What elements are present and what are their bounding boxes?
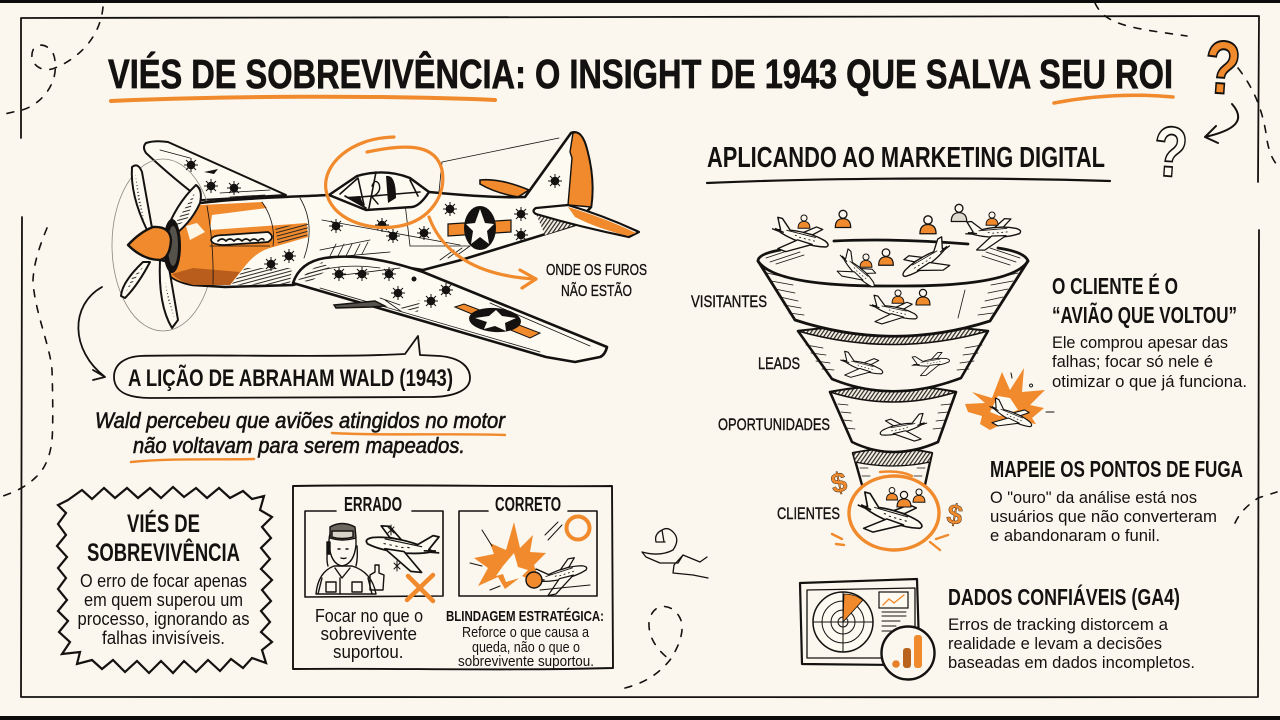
text block: escape points: usuários que não converteram bbox=[990, 507, 1217, 526]
icon: specks bbox=[388, 525, 400, 571]
icon: orange question mark: ? bbox=[1202, 25, 1243, 111]
starburst: definition: falhas invisíveis. bbox=[102, 628, 225, 648]
starburst: definition bbox=[57, 487, 272, 673]
caption: correto: Reforce o que causa a bbox=[462, 625, 590, 641]
text block: reliable data: Erros de tracking distorcem a bbox=[948, 615, 1169, 634]
text block: the customer: otimizar o que já funciona. bbox=[1052, 372, 1247, 391]
arrow: cockpit to missing holes note bbox=[429, 217, 536, 288]
sub-panel: errado: ERRADO bbox=[344, 494, 402, 516]
speech bubble: lesson heading: A LIÇÃO DE ABRAHAM WALD (1943) bbox=[128, 364, 453, 392]
fuselage bbox=[165, 132, 592, 287]
lesson text: não voltavam para serem mapeados. bbox=[133, 433, 465, 458]
funnel hatching bbox=[766, 248, 1020, 476]
wing gun bbox=[334, 301, 385, 308]
arrow: plane to lesson bbox=[78, 287, 105, 380]
cowling orange bbox=[167, 202, 308, 285]
caption: errado: Focar no que o bbox=[315, 606, 423, 626]
icon: impact ball bbox=[526, 572, 542, 588]
note: where the holes are not bbox=[546, 262, 647, 300]
scribble: hand doodle bbox=[642, 529, 708, 578]
funnel tier 2 bbox=[798, 326, 988, 391]
caption: correto: BLINDAGEM ESTRATÉGICA: bbox=[446, 608, 604, 625]
canopy glass and pilot bbox=[340, 172, 420, 208]
bottom black edge bbox=[0, 716, 1280, 720]
caption: errado: sobrevivente bbox=[320, 624, 417, 644]
text block: escape points: e abandonaram o funil. bbox=[990, 526, 1160, 545]
dashed flight path: top right bbox=[1095, 3, 1279, 167]
lesson text bbox=[95, 408, 507, 462]
propeller sweep bbox=[112, 159, 214, 331]
caption: errado bbox=[315, 606, 423, 662]
people in funnel bbox=[798, 204, 998, 305]
text block: the customer: Ele comprou apesar das bbox=[1052, 333, 1228, 352]
dashed flight path: top left bbox=[0, 7, 103, 115]
caption: correto: queda, não o que o bbox=[472, 640, 580, 656]
funnel bbox=[758, 204, 1028, 550]
text block: reliable data: baseadas em dados incompletos. bbox=[948, 653, 1195, 672]
icon: pilot with thumbs up bbox=[316, 524, 384, 594]
heading: applying to digital marketing bbox=[707, 142, 1110, 183]
spinner bbox=[128, 227, 171, 260]
note: where the holes are not: ONDE OS FUROS bbox=[546, 262, 647, 279]
exhaust stack bbox=[211, 232, 272, 245]
dollar signs bbox=[828, 466, 966, 531]
text block: the customer bbox=[1052, 272, 1247, 391]
text block: the customer: O CLIENTE É O bbox=[1052, 272, 1178, 299]
propeller blades bbox=[121, 165, 201, 328]
caption: errado: suportou. bbox=[333, 642, 404, 662]
funnel labels: OPORTUNIDADES bbox=[718, 415, 830, 434]
dashed flight path: left side bbox=[0, 228, 53, 497]
analytics badge bbox=[882, 626, 934, 680]
starburst: definition: VIÉS DE bbox=[127, 509, 200, 538]
starburst: definition: em quem superou um bbox=[84, 590, 243, 610]
sub-panel: correto: CORRETO bbox=[495, 494, 561, 516]
starburst: definition: SOBREVIVÊNCIA bbox=[87, 537, 240, 567]
caption: correto bbox=[446, 608, 604, 670]
highlight: orange circle around cockpit bbox=[326, 137, 443, 228]
speech bubble: lesson heading bbox=[114, 336, 470, 398]
text block: reliable data bbox=[948, 583, 1195, 672]
funnel labels: LEADS bbox=[758, 354, 800, 373]
bullet holes: fuselage bbox=[184, 158, 562, 271]
planes in funnel bbox=[767, 217, 1022, 447]
starburst: definition: processo, ignorando as bbox=[78, 609, 250, 629]
bullet holes: wing bbox=[332, 267, 453, 308]
far stabilizer bbox=[480, 180, 529, 197]
icon: damaged plane bbox=[362, 522, 442, 576]
funnel labels: VISITANTES bbox=[691, 292, 767, 311]
dollar signs: $ bbox=[945, 498, 966, 531]
icon: analytics monitor bbox=[800, 579, 934, 680]
starburst: definition: O erro de focar apenas bbox=[80, 571, 247, 591]
lesson text: Wald percebeu que aviões atingidos no motor bbox=[95, 408, 507, 433]
text block: the customer: falhas; focar só nele é bbox=[1052, 352, 1213, 371]
engine ring bbox=[163, 219, 181, 273]
icon: crashed plane bbox=[530, 554, 591, 600]
sub-panel: correto bbox=[446, 494, 604, 670]
dashed flight path: right side bbox=[1235, 492, 1277, 523]
cowling highlight bbox=[186, 223, 205, 240]
mini line chart bbox=[879, 592, 908, 608]
funnel tier 1 bbox=[758, 261, 1028, 336]
icon: explosion bbox=[474, 522, 546, 589]
near stabilizer bbox=[534, 205, 639, 237]
text block: reliable data: DADOS CONFIÁVEIS (GA4) bbox=[948, 583, 1180, 610]
antenna wire bbox=[439, 138, 559, 192]
wing roundel bbox=[455, 304, 540, 338]
funnel rim bbox=[758, 240, 1028, 286]
tail rudder bbox=[568, 133, 592, 207]
arrow: between question marks bbox=[1205, 104, 1238, 143]
note: where the holes are not: NÃO ESTÃO bbox=[561, 280, 632, 300]
funnel tier 3 bbox=[830, 386, 956, 452]
icon: outlined question mark: ? bbox=[1151, 112, 1190, 193]
icon: orange circle bbox=[566, 516, 590, 540]
panel: errado vs correto bbox=[293, 485, 613, 670]
tail shading bbox=[536, 214, 575, 235]
funnel tier 4 bbox=[853, 449, 932, 485]
text block: escape points bbox=[990, 456, 1243, 545]
dollar signs: $ bbox=[828, 466, 850, 500]
fuselage roundel bbox=[448, 206, 511, 250]
heading: applying to digital marketing: APLICANDO AO MARKETING DIGITAL bbox=[707, 142, 1105, 174]
far wing bbox=[144, 141, 286, 200]
text block: reliable data: realidade e levam a decisões bbox=[948, 634, 1162, 653]
top black edge bbox=[0, 0, 1280, 3]
caption: correto: sobrevivente suportou. bbox=[458, 654, 594, 670]
cowling shadow bbox=[172, 268, 240, 285]
panel lines bbox=[207, 195, 470, 284]
sub-panel: errado bbox=[305, 494, 443, 662]
dashed flight path: bottom loop bbox=[625, 606, 682, 688]
icon: crashing plane explosion bbox=[965, 368, 1054, 438]
main wing bbox=[293, 257, 607, 362]
funnel labels: CLIENTES bbox=[777, 504, 840, 523]
radar chart bbox=[813, 592, 873, 652]
icon: debris lines bbox=[470, 522, 590, 590]
funnel labels bbox=[691, 292, 840, 523]
icon: orange X bbox=[407, 575, 433, 601]
plane illustration bbox=[112, 132, 639, 362]
clients circle bbox=[832, 472, 948, 550]
text block: escape points: O "ouro" da análise está nos bbox=[990, 488, 1197, 507]
canopy bbox=[329, 172, 429, 210]
